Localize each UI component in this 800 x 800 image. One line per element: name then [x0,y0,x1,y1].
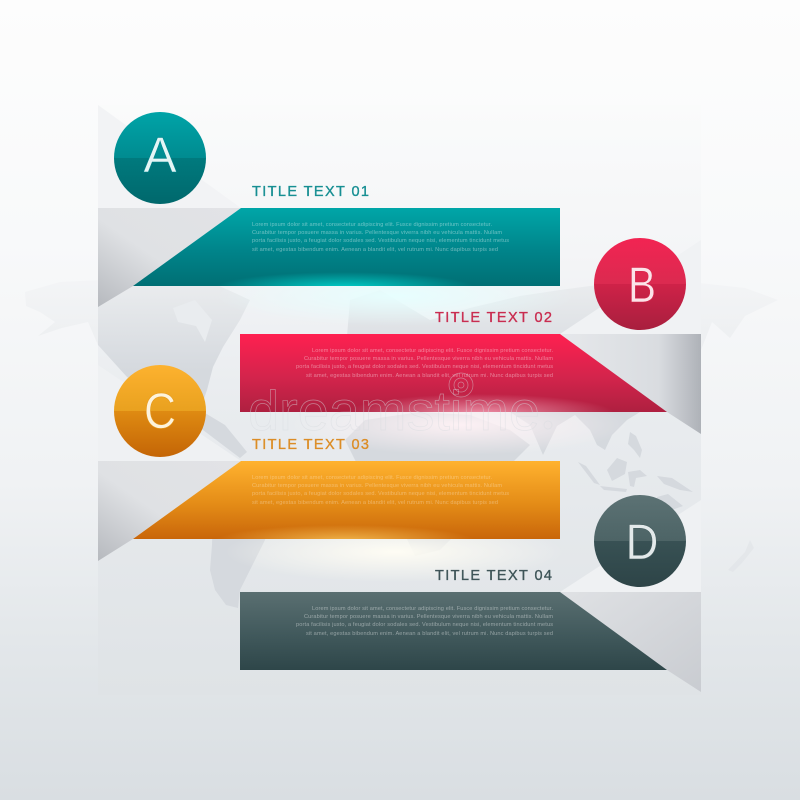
body: step A: Lorem ipsum dolor sit amet, consectetur adipiscing elit. Fusce dignissim pretium consectetur. [252,222,492,228]
body: step D: Lorem ipsum dolor sit amet, consectetur adipiscing elit. Fusce dignissim pretium consectetur. [312,606,553,612]
title: step B: TITLE TEXT 02 [435,310,552,326]
fold: step A [98,208,241,307]
panel: step D [240,495,701,692]
fold: step D [560,592,701,692]
background panel [98,105,701,695]
body: step D: Curabitur tempor posuere massa in varius. Pellentesque viverra nibh eu vehicula mattis. Nullam [304,614,553,620]
body: step C [252,475,509,506]
body: step B [296,348,553,379]
map hudson bay highlight [173,300,212,342]
body: step B: sit amet, egestas bibendum enim. Aenean a blandit elit, vel rutrum mi. Nunc dapibus turpis sed [306,373,553,379]
panel: step A [98,112,560,307]
banner: step B [240,334,667,412]
circle: B [594,238,686,330]
circle: A: A [143,127,177,183]
banner: step C [133,461,560,539]
body: step D [296,606,553,637]
title: step A: TITLE TEXT 01 [252,184,369,200]
body: step D: sit amet, egestas bibendum enim. Aenean a blandit elit, vel rutrum mi. Nunc dapibus turpis sed [306,631,553,637]
fold: step C [98,461,241,561]
body: step C: porta facilisis justo, a feugiat dolor sodales sed. Vestibulum neque nisi, elementum tincidunt metus [252,491,509,497]
panel: step C [98,365,560,561]
body: step A [252,222,509,253]
world map [25,280,778,608]
body: step B: Curabitur tempor posuere massa in varius. Pellentesque viverra nibh eu vehicula mattis. Nullam [304,356,553,362]
circle: A [114,112,206,204]
glow under bars [215,266,630,582]
watermark: dreamstime [248,379,540,442]
body: step B: Lorem ipsum dolor sit amet, consectetur adipiscing elit. Fusce dignissim pretium consectetur. [312,348,553,354]
circle: C [114,365,206,457]
body: step A: porta facilisis justo, a feugiat dolor sodales sed. Vestibulum neque nisi, elementum tincidunt metus [252,238,509,244]
body: step A: sit amet, egestas bibendum enim. Aenean a blandit elit, vel rutrum mi. Nunc dapibus turpis sed [252,247,498,253]
title: step C: TITLE TEXT 03 [252,437,369,453]
title: step D: TITLE TEXT 04 [435,568,552,584]
circle: D [594,495,686,587]
body: step D: porta facilisis justo, a feugiat dolor sodales sed. Vestibulum neque nisi, elementum tincidunt metus [296,622,553,628]
banner: step A [133,208,560,286]
body: step C: Lorem ipsum dolor sit amet, consectetur adipiscing elit. Fusce dignissim pretium consectetur. [252,475,492,481]
panel: step B [240,238,701,434]
body: step A: Curabitur tempor posuere massa in varius. Pellentesque viverra nibh eu vehicula mattis. Nullam [252,230,502,236]
body: step C: Curabitur tempor posuere massa in varius. Pellentesque viverra nibh eu vehicula mattis. Nullam [252,483,502,489]
circle: D: D [626,514,658,570]
body: step C: sit amet, egestas bibendum enim. Aenean a blandit elit, vel rutrum mi. Nunc dapibus turpis sed [252,500,498,506]
fold: step B [560,334,701,434]
banner: step D [240,592,667,670]
body: step B: porta facilisis justo, a feugiat dolor sodales sed. Vestibulum neque nisi, elementum tincidunt metus [296,364,553,370]
circle: B: B [628,257,656,313]
light diagonal facets [98,105,701,592]
circle: C: C [144,383,176,439]
